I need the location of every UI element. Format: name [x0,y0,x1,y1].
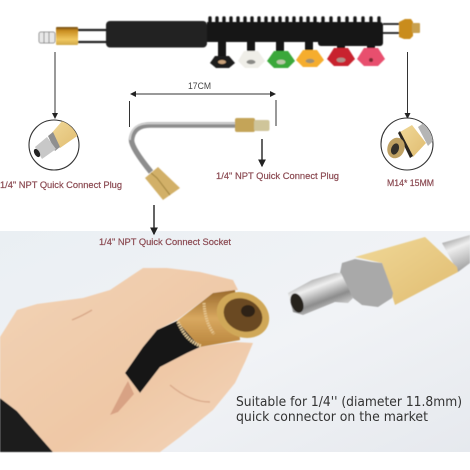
tube highlight [130,123,240,140]
nozzle green [267,51,295,68]
wand tip [39,32,55,43]
nozzle pink [357,48,385,66]
left arrowhead [130,91,136,97]
steel tube [132,125,240,172]
hand [0,268,253,452]
brass plug [235,118,255,132]
nozzle yellow [296,50,324,67]
detail circle: M14 thread [381,118,436,170]
label: plug middle: 1/4" NPT Quick Connect Plug [216,171,339,181]
nozzle red [327,48,355,66]
rods left [78,30,107,42]
steel rod [442,235,470,272]
arrow: wand end to M14 detail [406,52,408,118]
caption line 1: Suitable for 1/4'' (diameter 11.8mm) [236,395,462,410]
sleeve [0,398,53,452]
right extension line [275,100,277,126]
black grip [106,21,207,48]
plug opening [288,292,306,314]
gold hex fitting right [399,19,413,39]
label: plug left: 1/4" NPT Quick Connect Plug [0,180,122,190]
dimension text: 17CM [188,81,211,92]
socket knurl rear [178,322,201,346]
gold hex fitting left [56,27,78,45]
socket knurl front [204,303,214,334]
dimension: 17CM [130,81,276,127]
rods right [383,24,399,33]
brass socket [145,167,180,200]
product: bent extension tube [130,118,270,200]
finger crease [72,310,92,320]
steel plug [254,120,270,131]
photo: steel plug and gold fitting [288,235,470,315]
nozzle white [238,51,265,68]
left extension line [128,101,130,127]
caption [236,395,462,425]
thumb shading [170,385,210,402]
black tool body [125,321,200,393]
socket face [209,284,277,346]
nozzle black [210,56,235,68]
photo panel background [0,231,470,452]
gold collar [177,290,240,347]
photo: hand holding socket [0,268,277,452]
dimension line [132,93,275,95]
socket bore [218,292,268,338]
hex nut [340,259,393,307]
gold hex body [355,237,458,305]
palm shadow [110,381,134,415]
gold thread [412,23,420,33]
caption line 2: quick connector on the market [236,410,428,425]
socket inner [241,305,255,317]
arrow: to middle plug label [261,139,263,166]
detail circle: quick connect plug [29,120,80,170]
plug body [288,273,353,315]
arrow: to socket label [153,205,155,234]
nozzle holder [207,18,383,58]
arrow: wand tip to plug detail [54,52,56,118]
product: full wand with nozzles [39,18,420,68]
label: socket: 1/4" NPT Quick Connect Socket [99,237,231,247]
label: M14: M14* 15MM [387,178,434,188]
